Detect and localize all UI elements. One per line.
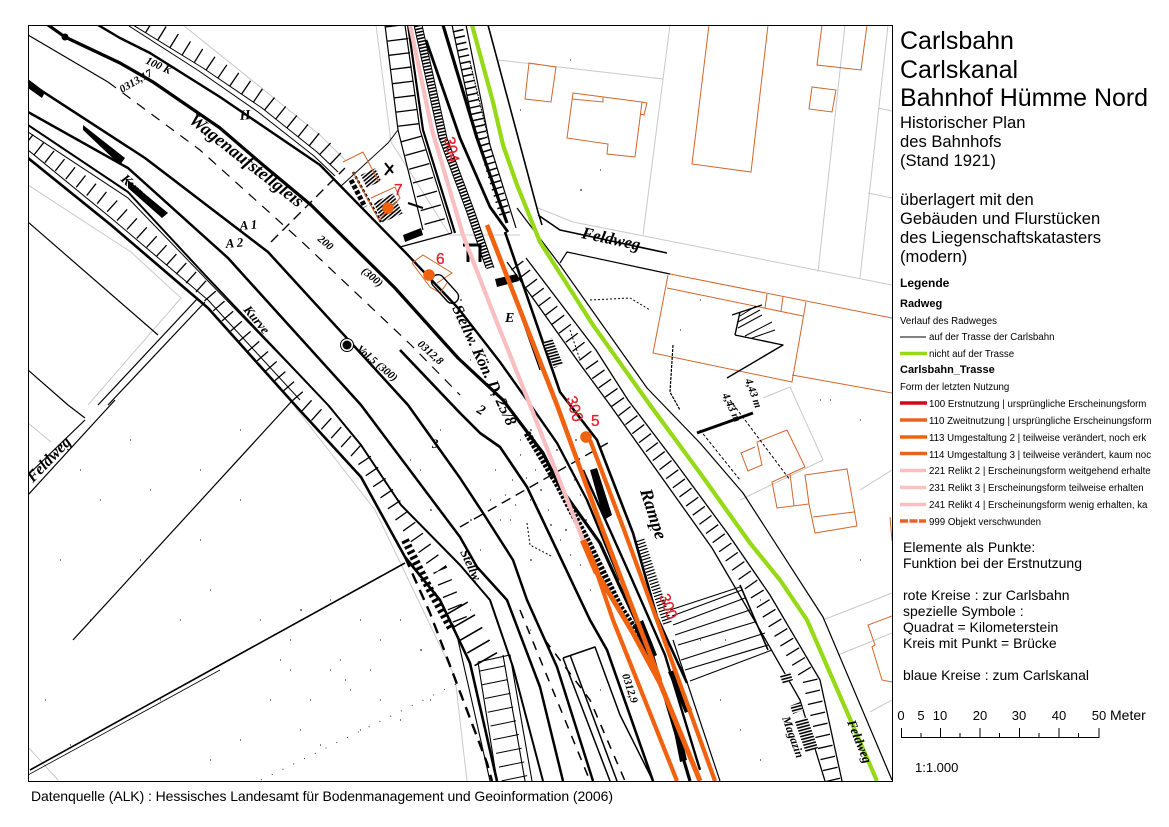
point 6: 6 [436, 251, 445, 268]
handwritten plan labels: 0312,8 [415, 338, 446, 368]
route number labels: 300 [655, 592, 680, 622]
point 7 [382, 182, 403, 214]
point symbol notes: Funktion bei der Erstnutzung [903, 555, 1082, 571]
legend group: Radweg: auf der Trasse der Carlsbahn [929, 332, 1054, 343]
legend group: Carlsbahn_Trasse [900, 364, 1152, 528]
handwritten plan labels: 100 K [144, 55, 174, 77]
dash-dot cross lines [271, 168, 613, 527]
scale bar: 10 [933, 708, 947, 723]
legend heading: Legende [900, 276, 950, 290]
handwritten plan labels: A 1 [238, 217, 258, 233]
legend group: Carlsbahn_Trasse: Carlsbahn_Trasse [900, 364, 995, 376]
track bundle at the top of the station [418, 25, 490, 268]
title: Carlsbahn [900, 27, 1014, 55]
legend group: Carlsbahn_Trasse: 114 Umgestaltung 3 | teilweise verändert, kaum noc [929, 450, 1151, 461]
bridge symbol: circle with dot [340, 338, 354, 352]
description text: des Liegenschaftskatasters [900, 228, 1101, 247]
scale bar: 5 [917, 708, 925, 723]
handwritten plan labels: Feldweg [844, 717, 875, 766]
route number labels: 304 [440, 135, 462, 164]
description text: (Stand 1921) [900, 151, 996, 170]
scale bar: 20 [973, 708, 987, 723]
scribbled details around the building at point 7 [351, 180, 365, 207]
point symbol notes: spezielle Symbole : [903, 603, 1024, 619]
handwritten plan labels: Feldweg [23, 434, 75, 486]
point 7: 7 [394, 182, 403, 199]
description text: überlagert mit den [900, 190, 1034, 209]
point 5 [580, 413, 600, 443]
hatched embankments [137, 18, 342, 165]
data source: Datenquelle (ALK) : Hessisches Landesamt für Bodenmanagement und Geoinformation (2006) [31, 788, 613, 804]
grey parcel lines of the cadastre [28, 25, 892, 781]
triangle with hatching in the yard [727, 305, 783, 378]
handwritten plan labels: 4,43 m [719, 390, 743, 424]
handwritten plan labels: 200 [314, 232, 336, 253]
description text: des Bahnhofs [900, 132, 1001, 151]
title: Carlskanal [900, 56, 1018, 84]
hatched building blocks [361, 168, 818, 753]
handwritten plan labels: Rampe [636, 485, 671, 542]
handwritten plan labels: 2 [473, 402, 488, 419]
legend group: Carlsbahn_Trasse: Form der letzten Nutzung [900, 382, 1009, 393]
Carlsbahn trace orange [487, 225, 715, 781]
description text [900, 113, 1101, 266]
handwritten plan labels: Feldweg [579, 223, 643, 254]
scale bar: 1:1.000 [915, 760, 958, 775]
legend group: Carlsbahn_Trasse: 113 Umgestaltung 2 | teilweise verändert, noch erk [929, 433, 1146, 444]
legend group: Carlsbahn_Trasse: 231 Relikt 3 | Erscheinungsform teilweise erhalten [929, 483, 1144, 494]
legend group: Radweg: nicht auf der Trasse [929, 349, 1014, 360]
panel: historical plan map [23, 18, 893, 782]
point symbol notes: Elemente als Punkte: [903, 539, 1035, 555]
scale bar: 40 [1052, 708, 1066, 723]
legend group: Carlsbahn_Trasse: 241 Relikt 4 | Erscheinungsform wenig erhalten, ka [929, 500, 1148, 511]
handwritten plan labels: H [238, 108, 252, 124]
handwritten plan labels: Kurve [240, 302, 273, 337]
title [900, 27, 1148, 112]
capsule structure near point 6 [430, 274, 460, 304]
point symbol notes [903, 539, 1089, 683]
point symbol notes: rote Kreise : zur Carlsbahn [903, 587, 1070, 603]
dense junction of tracks [524, 431, 640, 640]
description text: Gebäuden und Flurstücken [900, 209, 1100, 228]
handwritten plan labels: Vol.5 (300) [354, 343, 400, 384]
Carlsbahn trace relict pink [410, 25, 583, 540]
point symbol notes: Kreis mit Punkt = Brücke [903, 635, 1057, 651]
legend group: Carlsbahn_Trasse: 999 Objekt verschwunden [929, 517, 1041, 528]
orange outlines of buildings 6 and 7 [343, 152, 452, 293]
scale bar: 30 [1012, 708, 1026, 723]
scale bar: 0 [897, 708, 905, 723]
description text: Historischer Plan [900, 113, 1025, 132]
description text: (modern) [900, 247, 967, 266]
map noise specks [45, 60, 861, 760]
legend group: Carlsbahn_Trasse: 221 Relikt 2 | Erscheinungsform weitgehend erhalte [929, 466, 1151, 477]
scale bar [897, 707, 1146, 775]
handwritten plan labels: (300) [359, 265, 385, 290]
Radweg green route [472, 25, 877, 781]
legend group: Radweg [900, 298, 1054, 360]
scale bar: 50 [1092, 708, 1106, 723]
legend group: Carlsbahn_Trasse: 110 Zweitnutzung | ursprüngliche Erscheinungsform [929, 416, 1152, 427]
legend group: Carlsbahn_Trasse: 100 Erstnutzung | ursprüngliche Erscheinungsform [929, 399, 1146, 410]
handwritten plan labels: 4,43 m [742, 376, 764, 410]
handwritten plan labels: 3 [431, 436, 439, 451]
handwritten plan labels: Magazin [779, 713, 807, 760]
curved railway tracks of the 1921 plan [28, 18, 892, 781]
handwritten plan labels: 0313,17 [118, 67, 155, 96]
scale bar: Meter [1110, 707, 1146, 723]
handwritten plan labels: 0312,9 [619, 672, 640, 705]
handwritten plan labels: Wagenaufstellgleis [186, 109, 308, 211]
route number labels: 300 [562, 394, 586, 424]
ramp loading stairs hatching [670, 587, 772, 681]
point symbol notes: Quadrat = Kilometerstein [903, 619, 1058, 635]
handwritten plan labels: E [504, 311, 514, 326]
handwritten plan labels: Stellw. Kön. D. 25/8 [448, 303, 519, 428]
solid black switch wedges [28, 34, 692, 762]
point 5: 5 [591, 413, 600, 430]
legend group: Radweg: Verlauf des Radweges [900, 316, 997, 327]
legend [900, 276, 1152, 528]
point 6 [423, 251, 445, 281]
handwritten plan labels: Kurve [117, 171, 153, 206]
field road and straight field boundaries [28, 222, 205, 495]
title: Bahnhof Hümme Nord [900, 84, 1148, 112]
modern building outlines in orange [525, 25, 892, 682]
handwritten plan labels: Stellw. [457, 547, 486, 585]
route number labels [440, 135, 680, 622]
point symbol notes: blaue Kreise : zum Carlskanal [903, 667, 1089, 683]
legend group: Radweg: Radweg [900, 298, 942, 310]
handwritten plan labels: A 2 [224, 234, 244, 251]
handwritten plan labels [23, 55, 875, 766]
side tracks, ladder and platforms at the bottom [563, 647, 653, 781]
